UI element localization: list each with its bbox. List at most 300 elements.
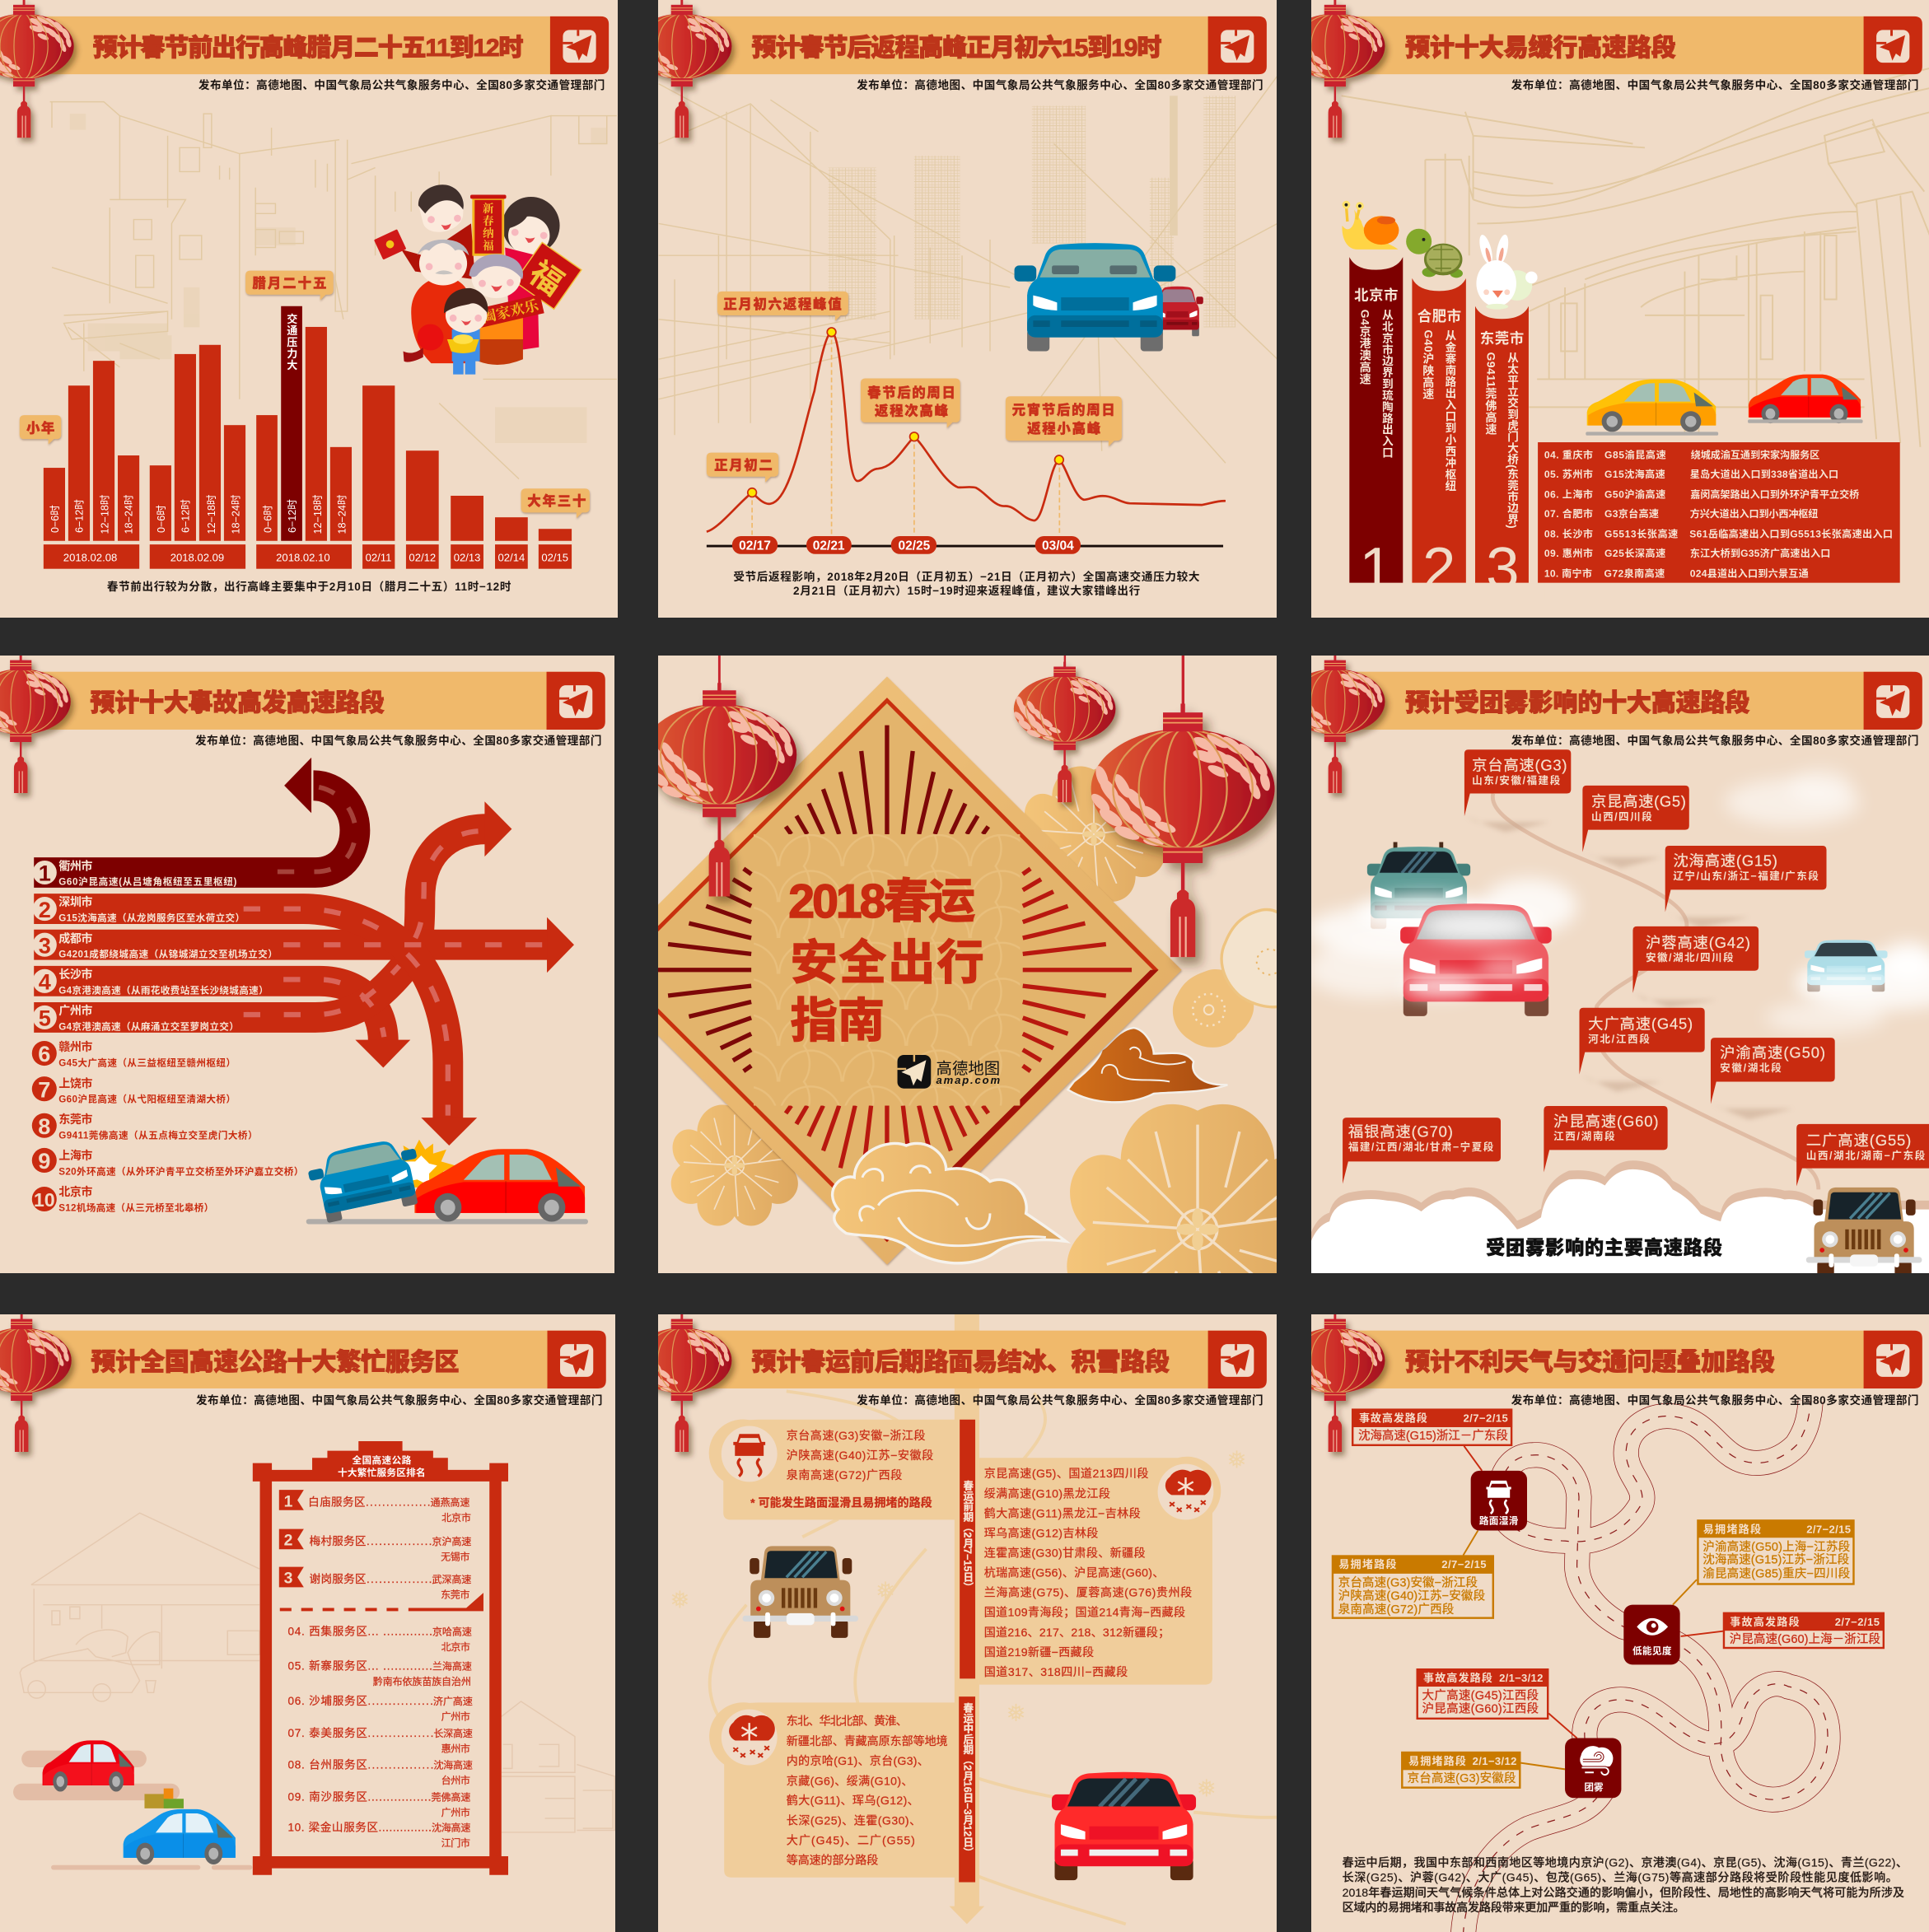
box: congestion east: 渝昆高速(G85)重庆−四川段 — [1702, 1567, 1850, 1581]
banner — [36, 672, 605, 730]
callouts — [1343, 749, 1929, 1186]
box: congestion west — [1332, 1556, 1494, 1618]
callout: second day — [707, 453, 778, 483]
icon: rabbit — [1476, 234, 1538, 310]
box: accidents G15 — [1352, 1409, 1512, 1445]
box: accidents Jiangxi — [1417, 1668, 1548, 1719]
ranking list: 5 — [39, 1006, 51, 1031]
ranking frame: 梅村服务区 — [310, 1535, 366, 1547]
ranking list: G9411莞佛高速（从五点梅立交至虎门大桥） — [58, 1129, 258, 1141]
title: 2018春运 — [788, 875, 975, 928]
summary text: 区域内的易拥堵和事故高发路段带来更加严重的影响，需重点关注。 — [1343, 1901, 1684, 1914]
icon: jeep — [742, 1546, 858, 1638]
table: ranks 4 to 10: 07. 合肥市 — [1544, 507, 1593, 520]
ranking list: 东莞市 — [58, 1113, 92, 1126]
column: rank 2: 2 — [1422, 535, 1455, 602]
bar chart: 02/14 — [498, 551, 525, 563]
panel: early period snow: 京昆高速(G5)、国道213四川段 — [984, 1467, 1148, 1480]
column: rank 2: G40沪陕高速 — [1422, 329, 1435, 400]
ranking frame: 全国高速公路 — [352, 1454, 412, 1466]
icon: lantern — [1284, 0, 1385, 138]
table: ranks 4 to 10: G5513长张高速 — [1604, 527, 1678, 539]
column: rank 3: 从太平立交到虎门大桥(东莞市边界) — [1506, 352, 1519, 529]
ranking frame — [253, 1441, 508, 1875]
table: ranks 4 to 10: G25长深高速 — [1604, 547, 1665, 559]
icon: low visibility — [1623, 1605, 1680, 1664]
ranking frame: 东莞市 — [441, 1588, 469, 1600]
ranking frame: 广州市 — [441, 1806, 470, 1818]
icon: lantern large — [1089, 656, 1275, 957]
ranking frame: 北京市 — [441, 1640, 470, 1653]
panel: slow highway sections — [1284, 0, 1929, 618]
caption: 春节前出行较为分散，出行高峰主要集中于2月10日（腊月二十五）11时−12时 — [107, 580, 511, 593]
box: accidents G60: 事故高发路段 — [1730, 1615, 1800, 1628]
callout: lantern festival peak — [1006, 396, 1122, 446]
table: ranks 4 to 10: 06. 上海市 — [1544, 488, 1593, 500]
box: congestion east: 沪渝高速(G50)上海−江苏段 — [1702, 1540, 1850, 1554]
icon: blue and red cars — [1015, 243, 1203, 352]
summary text: 春运中后期，我国中东部和西南地区等地境内京沪(G2)、京港澳(G4)、京昆(G5)、沈海(G15)、青兰(G22)、 — [1343, 1856, 1908, 1869]
ranking list: G15沈海高速（从龙岗服务区至水荷立交） — [58, 912, 245, 924]
caption — [733, 570, 1200, 597]
column: rank 2 — [1412, 278, 1466, 602]
bar chart: 0−6时 — [156, 505, 167, 533]
box: congestion Anhui — [1401, 1752, 1520, 1788]
box: congestion east: 2/7−2/15 — [1806, 1523, 1851, 1535]
icon: lantern — [631, 1314, 731, 1452]
panel: early period snow: 国道216、217、218、312新疆段； — [984, 1626, 1170, 1640]
icon: blue car with luggage — [124, 1789, 236, 1864]
panel: mid-late period snow: 长深(G25)、连霍(G30)、 — [787, 1813, 921, 1827]
ranking list: G60沪昆高速(从吕塘角枢纽至五里枢纽) — [58, 876, 237, 888]
column: rank 3: 3 — [1486, 535, 1520, 602]
box: accidents Jiangxi: 大广高速(G45)江西段 — [1422, 1689, 1539, 1703]
icon: car crash — [305, 1134, 588, 1225]
banner — [37, 1331, 606, 1388]
icon: jeep — [1806, 1188, 1922, 1279]
panel: pre-festival travel peak — [0, 0, 618, 618]
bar chart: 6−12时 — [287, 499, 298, 533]
title: 预计十大易缓行高速路段 — [1405, 34, 1676, 62]
title: 预计受团雾影响的十大高速路段 — [1405, 689, 1749, 717]
panel: early period snow — [979, 1457, 1221, 1685]
panel: mid-late period snow: 内的京哈(G1)、京台(G3)、 — [787, 1754, 929, 1767]
ranking frame: 沈海高速 — [432, 1821, 470, 1833]
table: ranks 4 to 10 — [1538, 442, 1900, 583]
box: accidents Jiangxi: 事故高发路段 — [1423, 1671, 1492, 1684]
callout: sunday secondary peak: 返程次高峰 — [875, 404, 949, 419]
caption: 2月21日（正月初六）15时−19时迎来返程峰值，建议大家错峰出行 — [793, 584, 1141, 597]
callout: lunar 25 — [245, 271, 334, 300]
title: 预计全国高速公路十大繁忙服务区 — [91, 1348, 459, 1376]
panel: mid-late period snow — [709, 1702, 955, 1878]
bar chart: 2018.02.09 — [170, 551, 224, 563]
caption: 受团雾影响的主要高速路段 — [1486, 1237, 1722, 1258]
panel: mid-late period snow: 新疆北部、青藏高原东部等地境 — [787, 1734, 948, 1748]
icon: teal car — [1367, 842, 1470, 929]
panel: icy and snowy sections: ❅ — [876, 1578, 895, 1604]
ranking list: 9 — [38, 1148, 50, 1174]
bar chart: 0−6时 — [263, 505, 274, 533]
callouts: 江西/湖南段 — [1553, 1130, 1615, 1142]
decoration: flowers — [671, 767, 1329, 1354]
panel: icy and snowy sections: ❅ — [670, 1588, 690, 1614]
column: rank 3: 东莞市 — [1480, 330, 1524, 347]
panel: slippery roads: 泉南高速(G72)广西段 — [787, 1468, 902, 1482]
road — [1463, 1401, 1828, 1932]
line chart: 02/25 — [898, 539, 931, 553]
bar chart: 18−24时 — [336, 494, 348, 534]
icon: low visibility: 低能见度 — [1632, 1645, 1672, 1656]
diamond card — [593, 677, 1182, 1264]
callout: second day: 正月初二 — [714, 457, 773, 473]
ranking frame: 十大繁忙服务区排名 — [338, 1467, 426, 1478]
ranking frame: 08. 台州服务区 — [287, 1758, 367, 1771]
banner — [40, 16, 609, 74]
callouts: 山西/湖北/湖南−广东段 — [1806, 1149, 1926, 1161]
icon: fog — [1565, 1738, 1621, 1798]
bar chart: 交通压力大 — [285, 312, 297, 371]
bar chart: 02/12 — [409, 551, 436, 563]
title: 预计十大事故高发高速路段 — [91, 689, 385, 717]
line chart: 02/21 — [813, 539, 845, 553]
bar chart: 12−18时 — [206, 494, 217, 534]
box: congestion west: 2/7−2/15 — [1441, 1558, 1487, 1570]
bar chart: 2018.02.10 — [276, 551, 330, 563]
ranking frame: 黔南布依族苗族自治州 — [373, 1675, 471, 1687]
ranking frame: ................ — [367, 1758, 433, 1771]
ranking list: 8 — [38, 1113, 50, 1139]
panel: mid-late period snow: 京藏(G6)、绥满(G10)、 — [787, 1774, 913, 1787]
bar chart: 6−12时 — [180, 499, 191, 533]
ranking frame: 06. 沙埔服务区 — [287, 1695, 367, 1707]
callout: lantern festival peak: 元宵节后的周日 — [1012, 403, 1115, 418]
ranking list: 1 — [39, 861, 51, 886]
title — [788, 875, 984, 1048]
cloud base — [1311, 1160, 1929, 1290]
box: accidents G60 — [1723, 1612, 1885, 1648]
ranking frame: ................ — [367, 1573, 432, 1585]
ranking frame: 04. 西集服务区 — [287, 1626, 367, 1638]
bar chart: 6−12时 — [73, 499, 85, 533]
table: ranks 4 to 10: 08. 长沙市 — [1544, 527, 1593, 539]
fog — [1401, 912, 1533, 998]
callouts: 辽宁/山东/浙江−福建/广东段 — [1673, 870, 1819, 882]
ranking frame: 09. 南沙服务区 — [287, 1791, 367, 1804]
ranking frame: 沈海高速 — [433, 1758, 473, 1771]
fog — [1357, 894, 1493, 934]
box: congestion west: 易拥堵路段 — [1338, 1557, 1397, 1570]
ranking frame: 台州市 — [441, 1774, 470, 1786]
line chart: 02/17 — [739, 539, 771, 553]
title: 安全出行 — [791, 936, 984, 989]
box: congestion west: 沪陕高速(G40)江苏−安徽段 — [1338, 1589, 1485, 1603]
icon: red car — [1052, 1772, 1196, 1880]
panel: accident-prone sections — [0, 656, 614, 1273]
ranking frame: 北京市 — [441, 1511, 471, 1524]
box: accidents G60: 2/7−2/15 — [1835, 1616, 1880, 1628]
ranking frame: ................ — [367, 1695, 433, 1707]
illustration: family: 新春纳福 — [480, 202, 497, 252]
box: congestion east: 沈海高速(G15)江苏−浙江段 — [1702, 1553, 1849, 1567]
callouts: 福银高速(G70) — [1348, 1122, 1453, 1140]
icon: red car — [43, 1740, 134, 1791]
timeline labels — [959, 1420, 975, 1883]
ranking frame: 京哈高速 — [432, 1626, 472, 1638]
ranking list: 赣州市 — [58, 1040, 92, 1053]
summary text: 2018年春运期间天气气候条件总体上对公路交通的影响偏小，但阶段性、局地性的高影响天气将可能为所涉及 — [1343, 1886, 1904, 1899]
title: 预计不利天气与交通问题叠加路段 — [1405, 1348, 1775, 1376]
panel: early period snow: 国道219新疆−西藏段 — [984, 1645, 1094, 1659]
box: congestion west: 京台高速(G3)安徽−浙江段 — [1338, 1575, 1478, 1589]
ranking list: G60沪昆高速（从弋阳枢纽至清湖大桥） — [58, 1094, 236, 1105]
box: accidents Jiangxi: 2/1−3/12 — [1499, 1672, 1543, 1684]
panel: icy and snowy sections: ❅ — [1226, 1447, 1247, 1473]
table: ranks 4 to 10: S61岳临高速出入口到G5513长张高速出入口 — [1689, 527, 1893, 539]
title: 预计春节后返程高峰正月初六15到19时 — [752, 35, 1161, 62]
callouts: 沪渝高速(G50) — [1720, 1043, 1825, 1061]
bar chart: 0−6时 — [49, 505, 61, 533]
icon: turtle — [1406, 229, 1463, 278]
callout: return peak: 正月初六返程峰值 — [723, 296, 842, 312]
caption: 受节后返程影响，2018年2月20日（正月初五）−21日（正月初六）全国高速交通压力较大 — [733, 570, 1200, 583]
panel: icy and snowy sections — [631, 1314, 1277, 1932]
panel: icy and snowy sections: ❅ — [1197, 1776, 1217, 1802]
ranking list: G4京港澳高速（从雨花收费站至长沙绕城高速） — [58, 984, 269, 996]
road stripes — [13, 1751, 252, 1870]
table: ranks 4 to 10: 星岛大道出入口到338省道出入口 — [1690, 468, 1838, 480]
bar chart: 18−24时 — [230, 494, 241, 534]
ranking list: 广州市 — [58, 1004, 92, 1017]
panel: busy service areas — [0, 1314, 615, 1932]
bar chart: 02/13 — [454, 551, 480, 563]
bar chart: 02/15 — [541, 551, 568, 563]
icon: lantern small — [1012, 656, 1115, 802]
summary text — [1343, 1856, 1908, 1914]
callout: lantern festival peak: 返程小高峰 — [1027, 421, 1101, 436]
line chart: 03/04 — [1042, 539, 1074, 553]
logo: amap — [898, 1055, 1000, 1089]
icon: red car in fog — [1400, 903, 1552, 1016]
box: accidents G15: 沈海高速(G15)浙江－广东段 — [1358, 1429, 1508, 1443]
panel: early period snow: 杭瑞高速(G56)、沪昆高速(G60)、 — [984, 1566, 1164, 1580]
ranking frame: ... ............. — [367, 1626, 432, 1638]
ranking frame: 济广高速 — [433, 1695, 473, 1707]
ranking frame: 京沪高速 — [432, 1535, 471, 1547]
panel: early period snow: 国道317、318四川−西藏段 — [984, 1665, 1128, 1678]
ranking frame: 1 — [284, 1492, 293, 1510]
line chart — [707, 328, 1226, 554]
callout: lunar 25: 腊月二十五 — [252, 275, 326, 291]
icon: lantern — [1284, 1314, 1385, 1452]
ranking frame: 07. 泰美服务区 — [287, 1727, 367, 1739]
ranking list — [32, 860, 303, 1214]
table: ranks 4 to 10: 04. 重庆市 — [1544, 448, 1593, 460]
ranking frame: 兰海高速 — [432, 1660, 472, 1673]
ranking list: 6 — [38, 1041, 50, 1066]
title: 指南 — [791, 995, 885, 1048]
column: rank 2: 合肥市 — [1418, 308, 1461, 324]
callout: small new year: 小年 — [26, 420, 54, 436]
icon: lantern — [658, 0, 738, 145]
table: ranks 4 to 10: 10. 南宁市 — [1544, 567, 1592, 579]
summary text: 长深(G25)、沪蓉(G42)、大广(G45)、包茂(G65)、兰海(G75)等高速部分路段将受阶段性能见度低影响。 — [1343, 1871, 1898, 1884]
icon: lantern left — [640, 656, 796, 896]
box: accidents G15: 事故高发路段 — [1359, 1412, 1427, 1425]
column: rank 3 — [1475, 306, 1529, 602]
icon: slippery road: 路面湿滑 — [1479, 1514, 1519, 1526]
ranking frame: ................ — [366, 1496, 430, 1508]
panel: early period snow: 绥满高速(G10)黑龙江段 — [984, 1486, 1110, 1500]
panel: mid-late period snow: 大广(G45)、二广(G55) — [787, 1833, 915, 1846]
table: ranks 4 to 10: 09. 惠州市 — [1544, 547, 1593, 559]
callout: sunday secondary peak — [861, 378, 960, 428]
publisher: 发布单位：高德地图、中国气象局公共气象服务中心、全国80多家交通管理部门 — [196, 1393, 602, 1407]
box: accidents G60: 沪昆高速(G60)上海－浙江段 — [1730, 1632, 1880, 1646]
callout: return peak — [717, 292, 848, 321]
ranking frame: 2 — [284, 1531, 292, 1549]
fog — [1305, 768, 1929, 1034]
timeline stripe — [950, 1314, 984, 1924]
callouts: 沪昆高速(G60) — [1553, 1113, 1658, 1130]
publisher: 发布单位：高德地图、中国气象局公共气象服务中心、全国80多家交通管理部门 — [1511, 78, 1918, 91]
panel: mid-late period snow: 等高速的部分路段 — [787, 1854, 878, 1867]
table: ranks 4 to 10: 05. 苏州市 — [1544, 468, 1593, 480]
logo: amap: amap.com — [936, 1074, 1000, 1086]
ranking list: 4 — [39, 969, 51, 995]
banner — [1353, 672, 1922, 730]
title: 预计春运前后期路面易结冰、积雪路段 — [752, 1348, 1170, 1376]
ranking frame: ................. — [367, 1791, 431, 1804]
ranking list: 上饶市 — [58, 1076, 92, 1090]
panel: early period snow: 珲乌高速(G12)吉林段 — [984, 1526, 1098, 1539]
banner — [1353, 1331, 1922, 1388]
banner — [698, 16, 1267, 74]
table: ranks 4 to 10: G15沈海高速 — [1604, 468, 1665, 480]
panel: early period snow: 鹤大高速(G11)黑龙江−吉林段 — [984, 1507, 1141, 1520]
panel: compound weather and traffic sections — [1284, 1314, 1929, 1932]
ranking frame: 谢岗服务区 — [310, 1573, 366, 1585]
panel: slippery roads: * 可能发生路面湿滑且易拥堵的路段 — [750, 1496, 932, 1509]
illustration: family: 阖家欢乐 — [479, 293, 541, 327]
table: ranks 4 to 10: 方兴大道出入口到小西冲枢纽 — [1690, 507, 1818, 520]
box: congestion Anhui: 易拥堵路段 — [1408, 1754, 1466, 1767]
publisher: 发布单位：高德地图、中国气象局公共气象服务中心、全国80多家交通管理部门 — [857, 78, 1263, 91]
ranking list: 衢州市 — [58, 860, 92, 873]
bar chart — [44, 306, 572, 569]
logo: amap: 高德地图 — [936, 1060, 1000, 1078]
box: congestion east — [1697, 1519, 1854, 1584]
ranking frame: 惠州市 — [441, 1743, 470, 1755]
ranking list: S12机场高速（从三元桥至北皋桥） — [58, 1202, 213, 1214]
ranking frame: 武深高速 — [432, 1573, 471, 1585]
icon: blue car in fog — [1805, 940, 1888, 992]
ranking list: S20外环高速（从外环沪青平立交桥至外环沪嘉立交桥） — [58, 1165, 303, 1177]
callouts: 安徽/湖北段 — [1720, 1062, 1782, 1074]
callouts: 福建/江西/湖北/甘肃−宁夏段 — [1348, 1141, 1494, 1153]
callout: new year eve: 大年三十 — [527, 493, 586, 509]
panel: post-festival return peak — [631, 0, 1277, 618]
ranking frame: ............... — [378, 1821, 432, 1833]
icon: red car — [1748, 375, 1863, 423]
ranking frame: ................ — [367, 1727, 433, 1739]
icon: yellow car — [1586, 379, 1718, 436]
panel: slippery roads — [709, 1420, 955, 1519]
column: rank 1: 1 — [1359, 535, 1393, 602]
ranking list: 深圳市 — [58, 895, 92, 908]
panel: mid-late period snow: 东北、华北北部、黄淮、 — [787, 1715, 908, 1728]
box: accidents Jiangxi: 沪昆高速(G60)江西段 — [1422, 1702, 1539, 1716]
icon: lantern — [0, 1314, 72, 1452]
icon: snail — [1342, 201, 1399, 250]
icon: lantern — [1284, 656, 1385, 793]
column: rank 1: G4京港澳高速 — [1359, 310, 1372, 385]
callouts: 沪蓉高速(G42) — [1646, 934, 1750, 951]
callouts: 大广高速(G45) — [1588, 1015, 1693, 1032]
panel: early period snow: 兰海高速(G75)、厦蓉高速(G76)贵州段 — [984, 1585, 1192, 1598]
ranking frame: 3 — [284, 1569, 293, 1587]
ranking frame: ... ............. — [367, 1660, 432, 1673]
ranking frame: 10. 梁金山服务区 — [287, 1821, 378, 1833]
ranking list: 7 — [38, 1076, 50, 1102]
table: ranks 4 to 10: G72泉南高速 — [1604, 567, 1665, 579]
ranking list: 3 — [39, 932, 51, 958]
bar chart: 2018.02.08 — [63, 551, 117, 563]
callouts: 山东/安徽/福建段 — [1472, 774, 1561, 786]
callouts: 安徽/湖北/四川段 — [1646, 951, 1734, 964]
ranking frame: 长深高速 — [433, 1727, 473, 1739]
bar chart: 12−18时 — [312, 494, 324, 534]
banner — [1353, 16, 1922, 74]
ranking frame: 通燕高速 — [430, 1496, 469, 1508]
panel: cover — [593, 656, 1329, 1354]
callout: new year eve — [521, 488, 590, 518]
box: accidents G15: 2/7−2/15 — [1463, 1412, 1508, 1425]
ranking list: 10 — [34, 1189, 55, 1211]
ranking list: G4京港澳高速（从麻涌立交至萝岗立交） — [58, 1020, 239, 1032]
table: ranks 4 to 10: G3京台高速 — [1604, 507, 1659, 520]
ranking frame: ................ — [367, 1535, 432, 1547]
callouts: 二广高速(G55) — [1806, 1132, 1911, 1149]
callouts: 河北/江西段 — [1588, 1033, 1650, 1045]
panel: slippery roads: 沪陕高速(G40)江苏−安徽段 — [787, 1449, 933, 1462]
decoration: gold cloud — [833, 1143, 1066, 1263]
column: rank 1 — [1349, 257, 1403, 602]
table: ranks 4 to 10: 东江大桥到G35济广高速出入口 — [1690, 547, 1830, 559]
table: ranks 4 to 10: G85渝昆高速 — [1604, 448, 1666, 460]
box: congestion Anhui: 京台高速(G3)安徽段 — [1408, 1771, 1516, 1785]
column: rank 1: 北京市 — [1354, 287, 1398, 303]
illustration: family: 福 — [523, 255, 569, 302]
panel: mid-late period snow: 鹤大(G11)、珲乌(G12)、 — [787, 1794, 919, 1807]
callout: small new year — [20, 415, 61, 444]
table: ranks 4 to 10: 024县道出入口到六景互通 — [1690, 567, 1809, 579]
table: ranks 4 to 10: G50沪渝高速 — [1604, 488, 1665, 500]
box: congestion west: 泉南高速(G72)广西段 — [1338, 1603, 1454, 1617]
road line — [1492, 794, 1819, 1189]
callouts: 沈海高速(G15) — [1673, 852, 1777, 870]
table: ranks 4 to 10: 绕城成渝互通到宋家沟服务区 — [1691, 448, 1819, 460]
timeline labels: 春运中后期（2月16日−3月12日） — [961, 1702, 974, 1857]
publisher: 发布单位：高德地图、中国气象局公共气象服务中心、全国80多家交通管理部门 — [1511, 734, 1918, 747]
box: congestion Anhui: 2/1−3/12 — [1473, 1755, 1516, 1767]
icon: slippery road — [1471, 1471, 1527, 1531]
box: congestion east: 易拥堵路段 — [1703, 1522, 1761, 1535]
publisher: 发布单位：高德地图、中国气象局公共气象服务中心、全国80多家交通管理部门 — [857, 1393, 1263, 1407]
banner — [698, 1331, 1267, 1388]
panel: early period snow: 连霍高速(G30)甘肃段、新疆段 — [984, 1547, 1146, 1560]
panel: early period snow: 国道109青海段；国道214青海−西藏段 — [984, 1606, 1185, 1620]
